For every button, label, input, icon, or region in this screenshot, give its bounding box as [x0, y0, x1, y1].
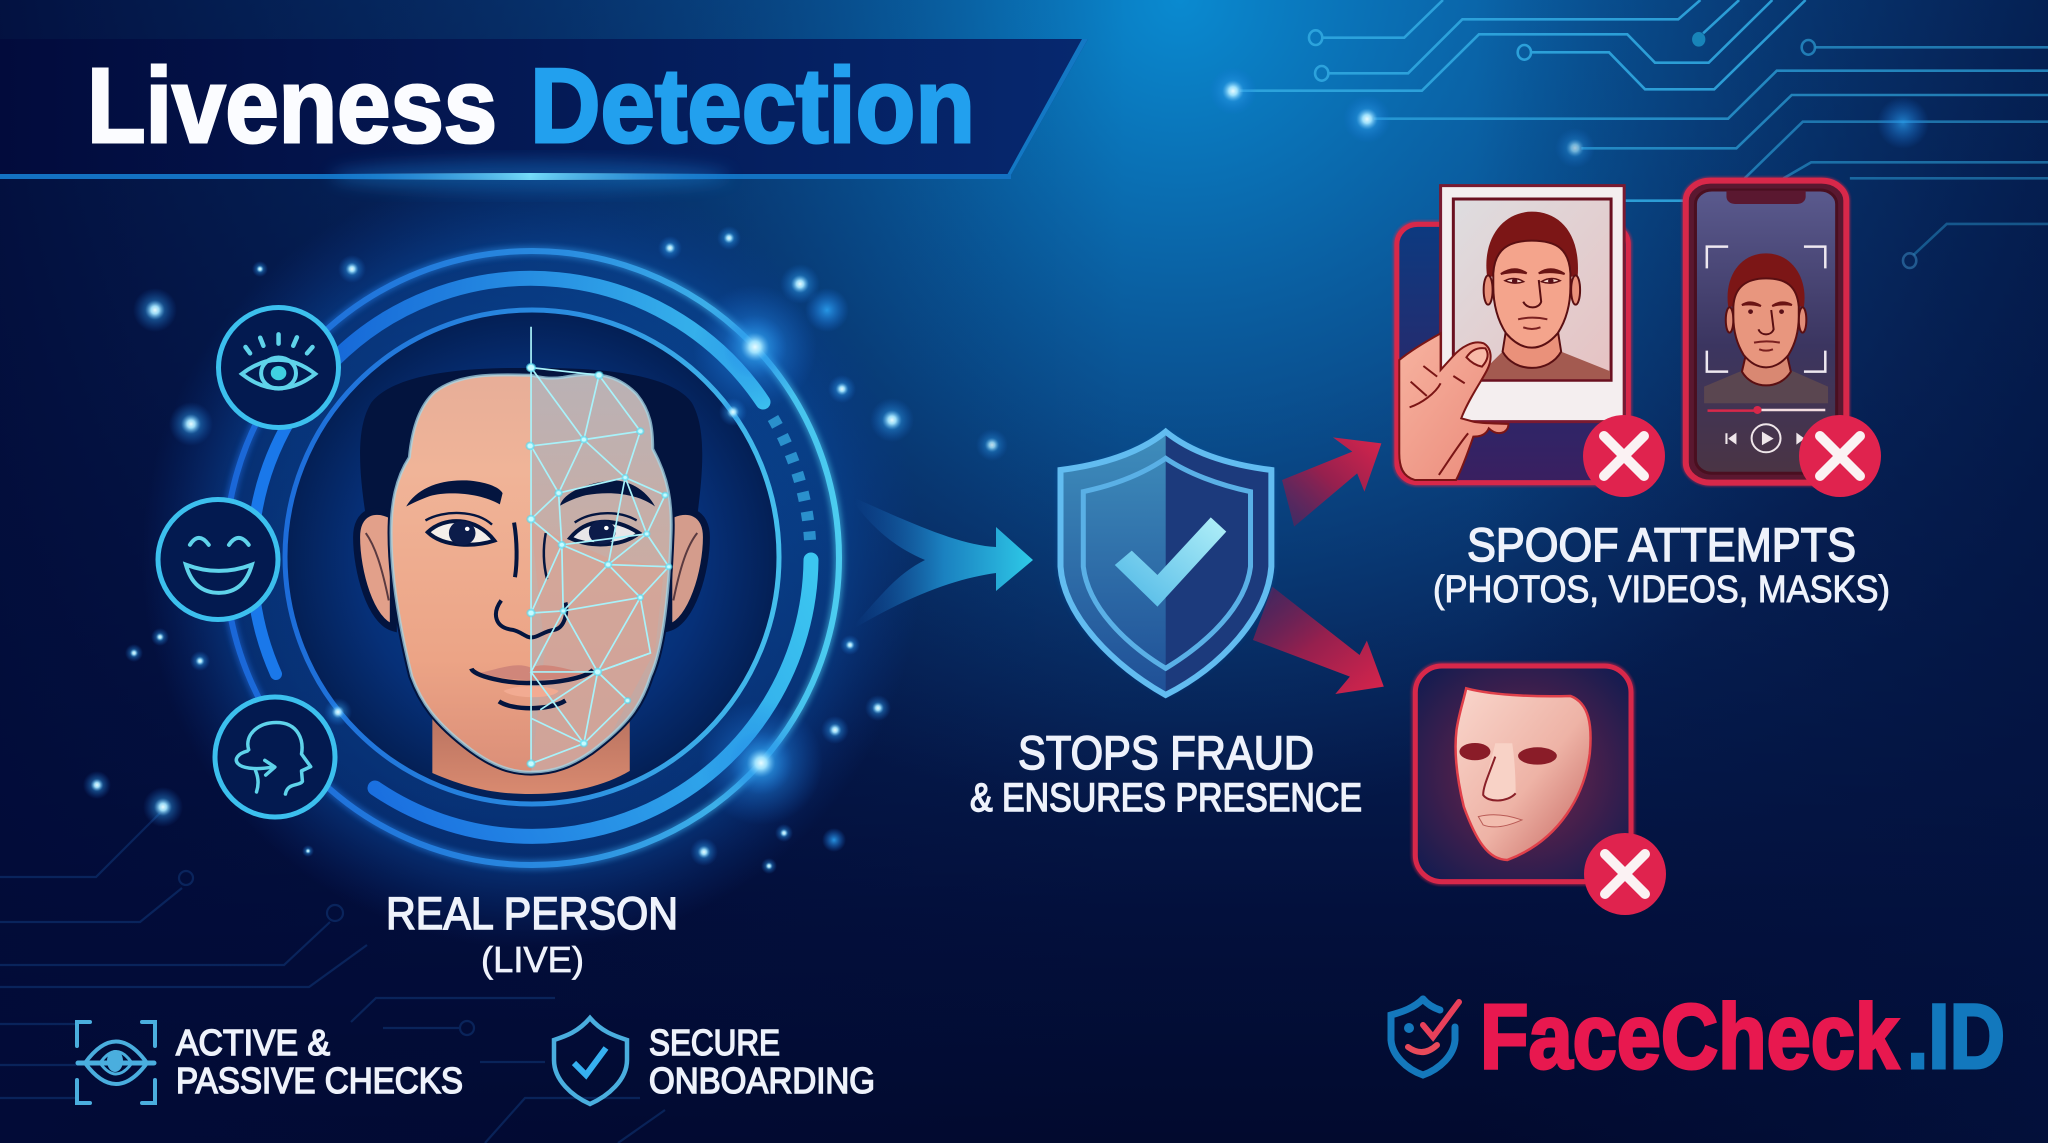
- icon: rejected mask: [1584, 833, 1666, 915]
- sparkle particles: [83, 226, 1008, 874]
- icon: scan eye: [77, 1022, 155, 1103]
- title text: Detection: [530, 47, 975, 165]
- mouth: [471, 665, 593, 708]
- circuit traces: bottom left: [0, 813, 665, 1143]
- panel: photo spoof: [1397, 186, 1628, 483]
- stops fraud label: [970, 726, 1362, 820]
- right eye: [570, 513, 639, 544]
- arrow: to photo and video spoofs: [1282, 437, 1381, 527]
- stops fraud label: STOPS FRAUD: [1018, 726, 1314, 779]
- flares on ring: [324, 285, 823, 825]
- spoof attempts label: (PHOTOS, VIDEOS, MASKS): [1433, 569, 1890, 611]
- phone screen: [1695, 190, 1837, 473]
- title text: Liveness: [87, 47, 497, 165]
- real person label: [386, 888, 678, 980]
- title banner: [0, 39, 1088, 192]
- lower arc: [375, 560, 811, 836]
- card glow: [1397, 224, 1628, 483]
- card glow: [1415, 666, 1631, 882]
- circuit traces: top right: [1240, 0, 2048, 268]
- scanner rings: [225, 251, 839, 865]
- icon: rejected video: [1799, 415, 1881, 497]
- icon: head turn: [215, 697, 335, 817]
- icon: blink eye: [218, 308, 338, 428]
- shield glow: [1061, 432, 1271, 695]
- video progress bar: [1708, 406, 1825, 414]
- spoof attempts label: [1433, 518, 1890, 611]
- left arc: [252, 420, 290, 674]
- shield body: [1061, 432, 1271, 695]
- panel: mask spoof: [1415, 666, 1631, 882]
- real person label: (LIVE): [481, 939, 584, 980]
- video controls: [1725, 424, 1805, 452]
- phone body: [1686, 181, 1846, 483]
- face scan brackets: [1707, 247, 1825, 372]
- neck: [432, 706, 630, 794]
- facial mesh: [531, 327, 669, 764]
- icon: logo shield: [1391, 999, 1459, 1075]
- tick marks: [773, 418, 810, 540]
- arrows and shield: [1061, 432, 1384, 695]
- arrow: to mask spoof: [1253, 587, 1384, 694]
- card frame: [1415, 666, 1631, 882]
- left eye: [425, 513, 494, 545]
- skin: [391, 374, 672, 772]
- circuit nodes: glowing points: [1209, 67, 1929, 168]
- stops fraud label: & ENSURES PRESENCE: [970, 776, 1362, 820]
- face rim light: [391, 375, 671, 772]
- secure onboarding: [554, 1018, 875, 1104]
- face outline: [391, 375, 671, 772]
- inner disc: [285, 310, 779, 804]
- secure onboarding: ONBOARDING: [649, 1060, 875, 1101]
- printed face: [1473, 212, 1611, 381]
- check mark: [1115, 517, 1226, 607]
- mesh nodes: [526, 364, 672, 767]
- hand holding photo: [1399, 333, 1508, 480]
- title text: [87, 47, 975, 165]
- arrow: face to shield: [848, 495, 1033, 632]
- spoof attempts label: SPOOF ATTEMPTS: [1467, 518, 1856, 571]
- secure onboarding: SECURE: [649, 1022, 780, 1063]
- active and passive checks: [77, 1022, 463, 1103]
- printed photo: [1441, 186, 1624, 422]
- portrait: half scanned face: [357, 327, 706, 794]
- icon: smile: [158, 500, 278, 620]
- top arc: [334, 278, 763, 402]
- logo: FaceCheck.ID: FaceCheck: [1480, 986, 1900, 1088]
- eyebrows: [406, 480, 655, 507]
- active and passive checks: ACTIVE &: [176, 1022, 330, 1063]
- phone glow: [1686, 181, 1846, 483]
- right ear: [669, 511, 706, 628]
- left ear: [357, 511, 393, 628]
- hair: [360, 368, 702, 516]
- logo: FaceCheck.ID: .ID: [1907, 986, 2005, 1088]
- on-screen face: [1704, 253, 1828, 403]
- notch: [1726, 191, 1806, 204]
- card frame: [1397, 224, 1628, 483]
- nose: [496, 523, 566, 638]
- panel: video spoof: [1686, 181, 1846, 483]
- icon: shield check: [554, 1018, 627, 1104]
- active and passive checks: PASSIVE CHECKS: [176, 1060, 463, 1101]
- icon: rejected photo: [1583, 415, 1665, 497]
- glow behind scanner ring: [142, 168, 922, 948]
- real person label: REAL PERSON: [386, 888, 678, 939]
- mask: [1456, 688, 1591, 860]
- outer ring glow: [225, 251, 839, 865]
- outer ring: [225, 251, 839, 865]
